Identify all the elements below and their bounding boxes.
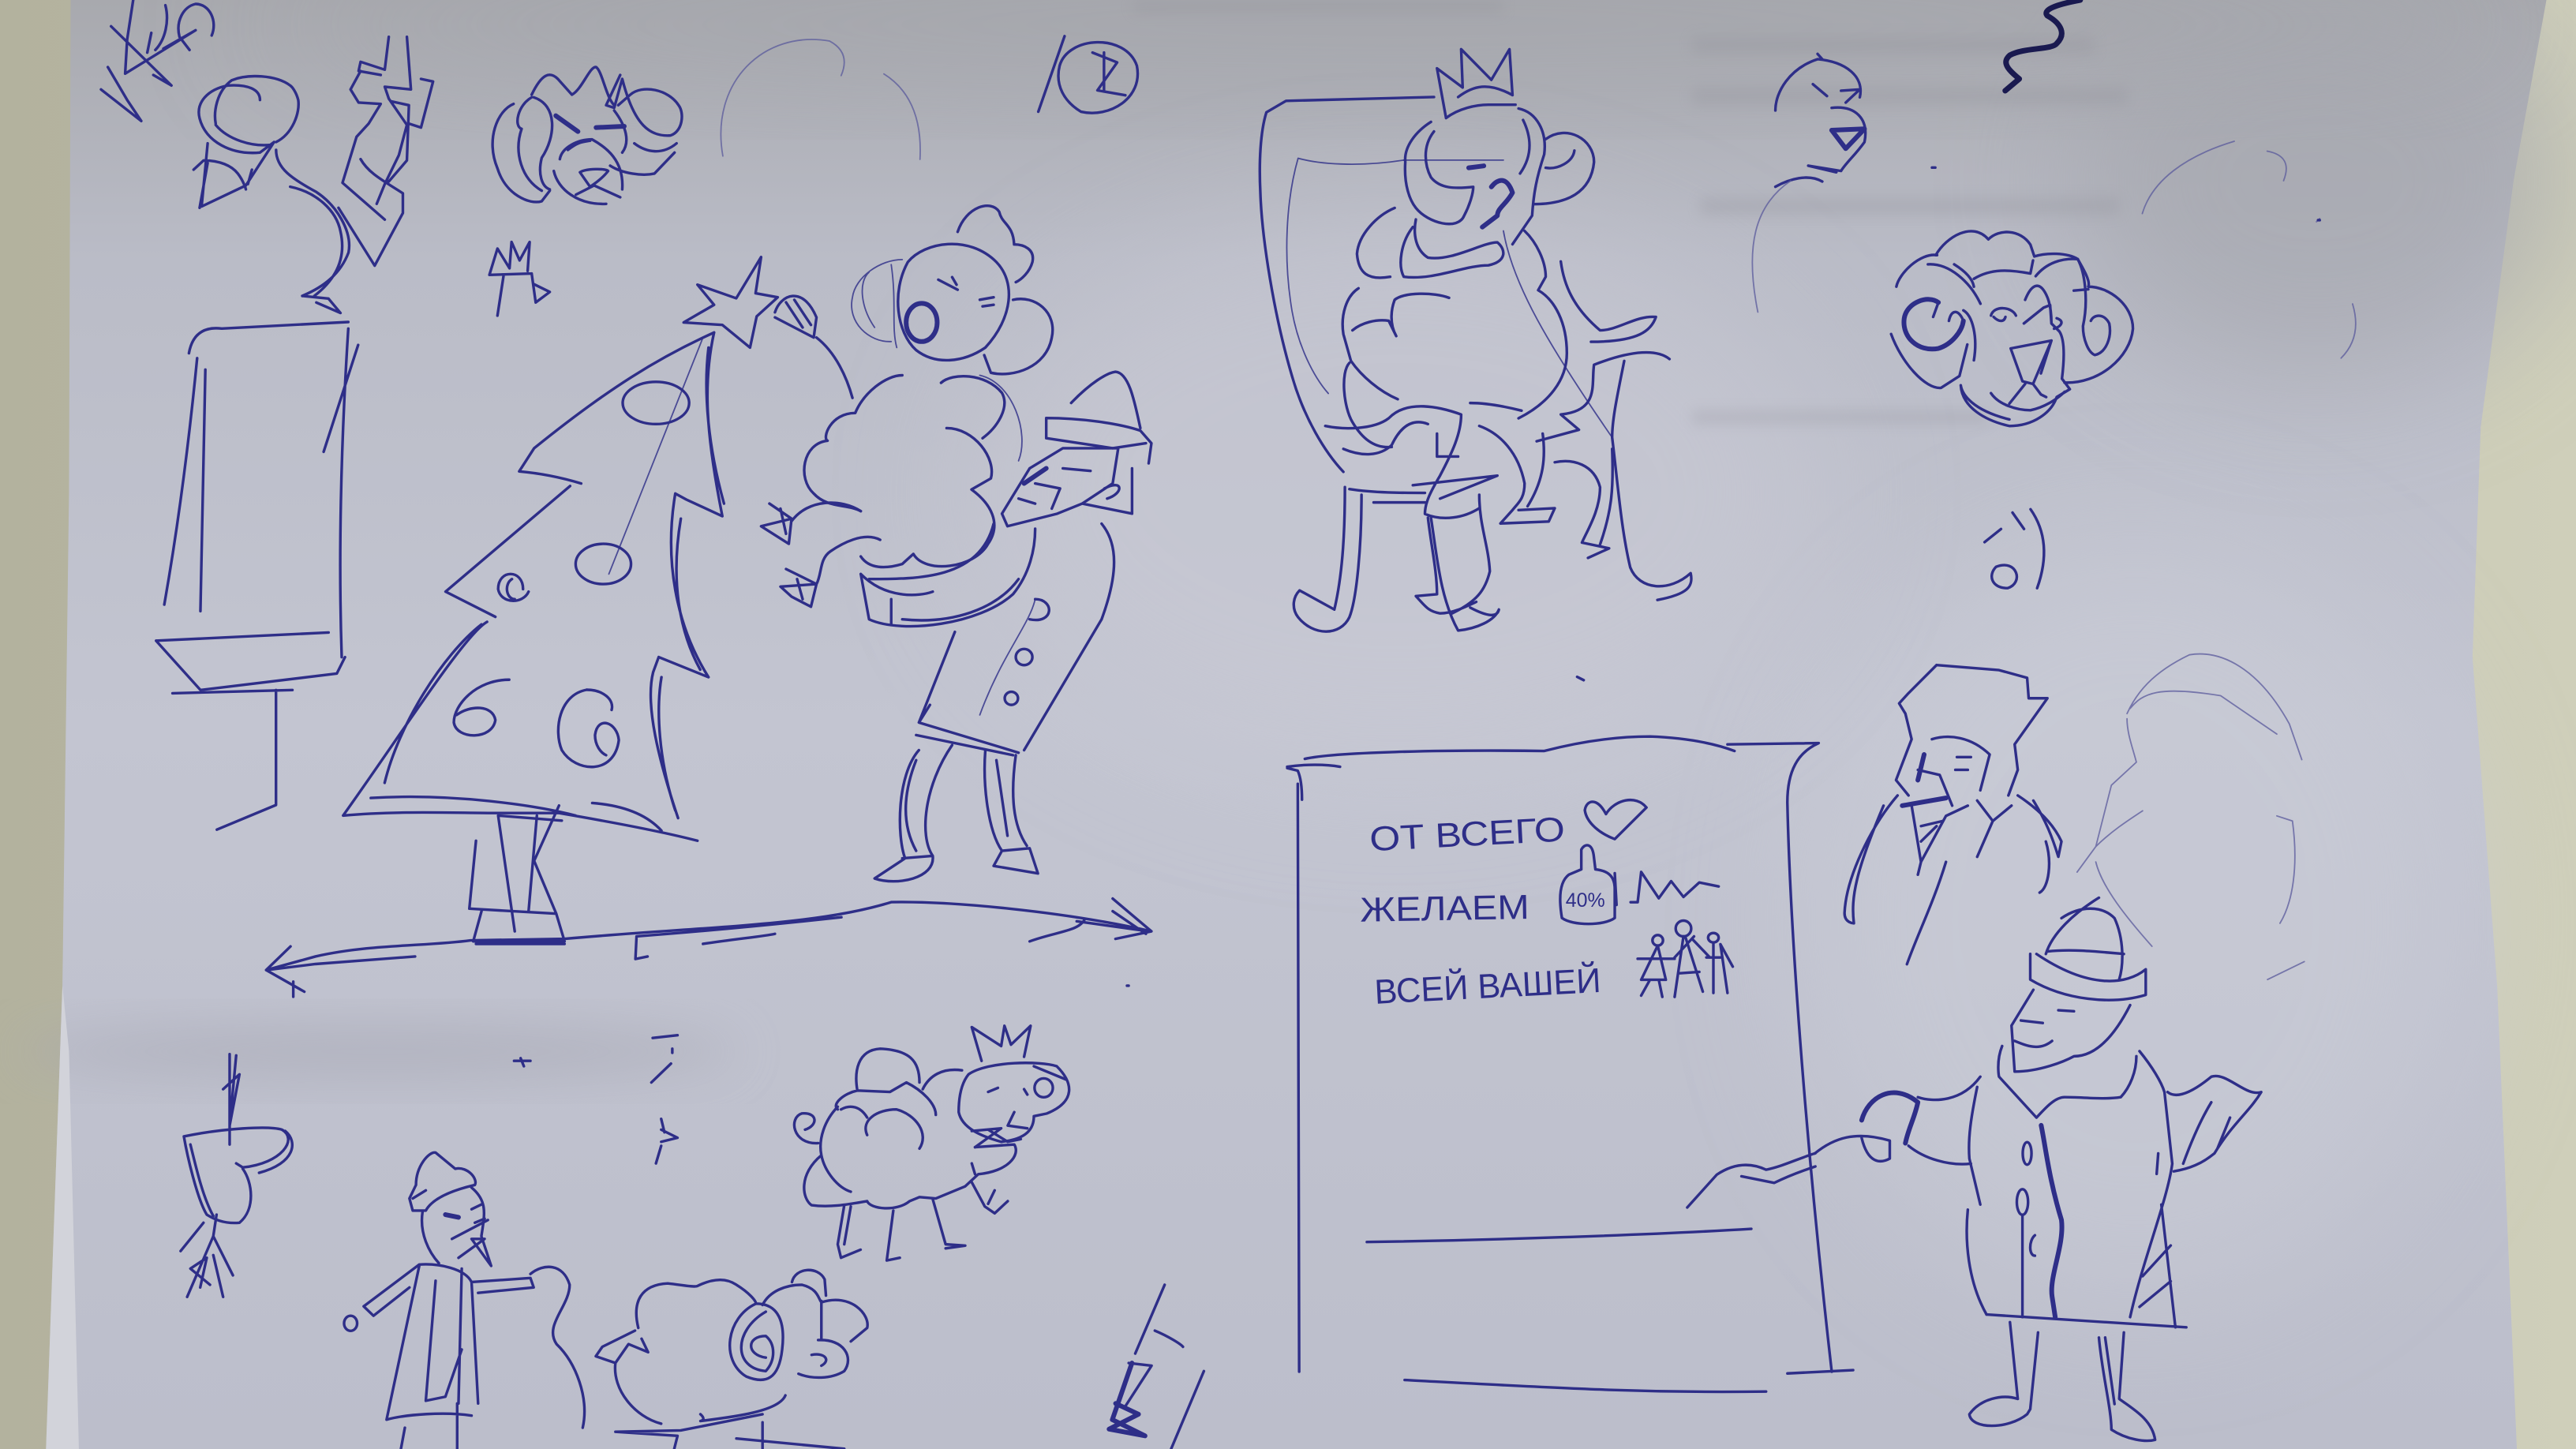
santa figure xyxy=(1815,897,2261,1441)
tree scene: tree, sheep and santa xyxy=(266,206,1151,997)
card outline xyxy=(1287,736,1832,1372)
sheep king on throne xyxy=(1260,49,1691,631)
scribble bottom xyxy=(1125,1285,1204,1449)
show-through text smudges xyxy=(1133,0,2128,424)
santa lifting sheep xyxy=(861,372,1151,882)
profile head xyxy=(1776,54,1866,187)
woolly body xyxy=(1342,208,1503,399)
card text: we wish: ЖЕЛАЕМ xyxy=(1360,888,1530,930)
small marks xyxy=(514,1035,677,1163)
small ball ornament xyxy=(1039,36,1138,113)
ball on a neck xyxy=(193,77,349,313)
top-left sketches xyxy=(101,0,682,316)
held ribbon xyxy=(1687,1153,1815,1208)
crown xyxy=(1437,49,1515,118)
man with rope xyxy=(364,1152,585,1449)
faint shoulder xyxy=(1752,181,1791,313)
card text: from all: ОТ ВСЕГО xyxy=(1368,810,1566,859)
heart with arrow xyxy=(181,1054,292,1297)
head and ears xyxy=(1405,122,1473,224)
small crown xyxy=(489,242,550,316)
black squiggle xyxy=(2005,0,2080,91)
icons: heart, bottle and family xyxy=(1560,800,1733,997)
bottom-left sketches xyxy=(181,1026,1204,1449)
card text: your whole: ВСЕЙ ВАШЕЙ xyxy=(1373,960,1602,1012)
pillar sketch xyxy=(156,322,358,829)
christmas tree xyxy=(343,332,724,942)
faint cloud top right xyxy=(2142,141,2356,358)
signature lines xyxy=(1367,1229,1853,1392)
throne xyxy=(1260,97,1691,631)
crowned sheep xyxy=(959,1026,1069,1148)
faint cloud arcs xyxy=(721,39,920,159)
faint cloud right xyxy=(2077,654,2305,979)
sheep head top xyxy=(492,67,682,204)
big sheep bottom xyxy=(596,1270,867,1449)
star on tree xyxy=(683,257,777,347)
bearded man bust xyxy=(1844,665,2061,964)
scribble xyxy=(101,0,214,121)
small dots xyxy=(1127,167,2320,986)
small face xyxy=(1985,509,2044,588)
card on easel xyxy=(1287,736,1853,1392)
ground arrow xyxy=(266,899,1151,997)
ribbon shape xyxy=(339,37,433,266)
ram head xyxy=(1891,231,2133,426)
legs xyxy=(1325,406,1497,518)
head and squiggle at top center xyxy=(1776,0,2080,187)
sheep lifted xyxy=(761,206,1053,607)
bottle label: 40% xyxy=(1566,889,1605,912)
bearded man and santa figure xyxy=(1815,665,2261,1441)
